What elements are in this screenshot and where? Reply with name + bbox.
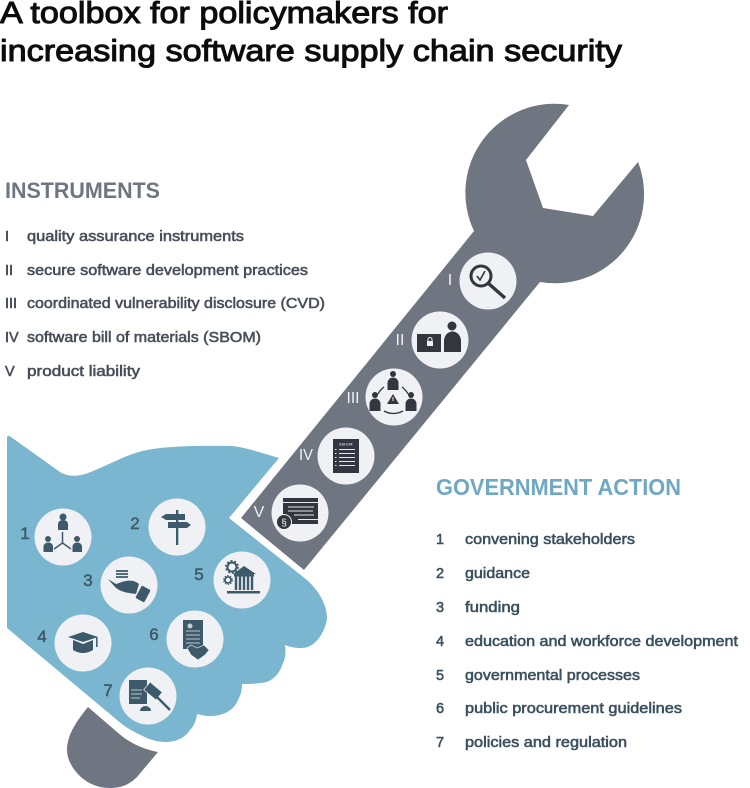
government action list: 6	[436, 701, 444, 717]
instrument list	[5, 229, 325, 380]
government action list: policies and regulation	[465, 735, 627, 751]
action 1: convening stakeholders	[20, 508, 92, 566]
instrument I: magnifier	[448, 252, 516, 310]
instrument list: coordinated vulnerability disclosure (CVD)	[27, 296, 325, 312]
government action list: convening stakeholders	[465, 532, 635, 548]
action 2: guidance signpost: 2	[130, 514, 140, 533]
government action list	[436, 532, 738, 751]
instrument list: product liability	[27, 364, 141, 380]
action 6: procurement guidelines	[149, 610, 224, 668]
government action list: 7	[436, 735, 444, 751]
instrument II: secure development: II	[396, 332, 404, 349]
instrument list: quality assurance instruments	[27, 229, 244, 245]
wrench instruments	[254, 252, 516, 542]
government action list: 5	[436, 668, 444, 684]
instrument list: II	[5, 263, 13, 279]
instrument V: product liability	[254, 484, 328, 542]
panel: instruments legend	[5, 178, 325, 380]
instrument list: IV	[5, 330, 19, 346]
thumb	[67, 707, 158, 788]
government action list: governmental processes	[465, 668, 640, 684]
instrument II: secure development	[396, 312, 468, 368]
instrument III: coordinated disclosure	[346, 368, 422, 426]
title: increasing software supply chain security	[0, 33, 623, 68]
action 4: education cap	[37, 614, 112, 672]
government action list: 2	[436, 566, 444, 582]
government action list: funding	[465, 600, 520, 616]
wrench	[241, 104, 644, 570]
government action list: 1	[436, 532, 444, 548]
government action list: public procurement guidelines	[465, 701, 682, 717]
instrument list: III	[5, 296, 17, 312]
government action list: guidance	[465, 566, 530, 582]
action 6: procurement guidelines: 6	[149, 625, 159, 644]
action 7: policies and regulation	[103, 668, 176, 724]
action 5: governmental processes	[194, 552, 270, 608]
instrument V: product liability: §	[281, 517, 287, 529]
government action list: 3	[436, 600, 444, 616]
instrument V: product liability: V	[254, 504, 265, 521]
instrument IV: SBOM document	[299, 428, 374, 484]
action 2: guidance signpost	[130, 498, 206, 556]
hand	[7, 436, 327, 742]
action 3: funding hand	[83, 556, 158, 614]
instrument IV: SBOM document: IV	[299, 447, 313, 464]
instrument list: I	[5, 229, 9, 245]
instrument list: software bill of materials (SBOM)	[27, 330, 261, 346]
action 5: governmental processes: 5	[194, 565, 204, 584]
government action list: 4	[436, 634, 444, 650]
hand actions	[20, 498, 270, 724]
title	[0, 0, 623, 68]
heading: instruments: INSTRUMENTS	[5, 178, 160, 203]
action 4: education cap: 4	[37, 627, 47, 646]
instrument III: coordinated disclosure: III	[346, 390, 360, 407]
action 7: policies and regulation: 7	[103, 681, 113, 700]
action 3: funding hand: 3	[83, 571, 93, 590]
instrument I: magnifier: I	[448, 272, 452, 289]
instrument IV: SBOM document: SBOM	[339, 442, 353, 446]
heading: government action: GOVERNMENT ACTION	[436, 474, 681, 500]
instrument list: V	[5, 364, 15, 380]
panel: government action legend	[436, 474, 738, 751]
government action list: education and workforce development	[465, 634, 738, 650]
instrument list: secure software development practices	[27, 263, 308, 279]
action 1: convening stakeholders: 1	[20, 524, 30, 543]
